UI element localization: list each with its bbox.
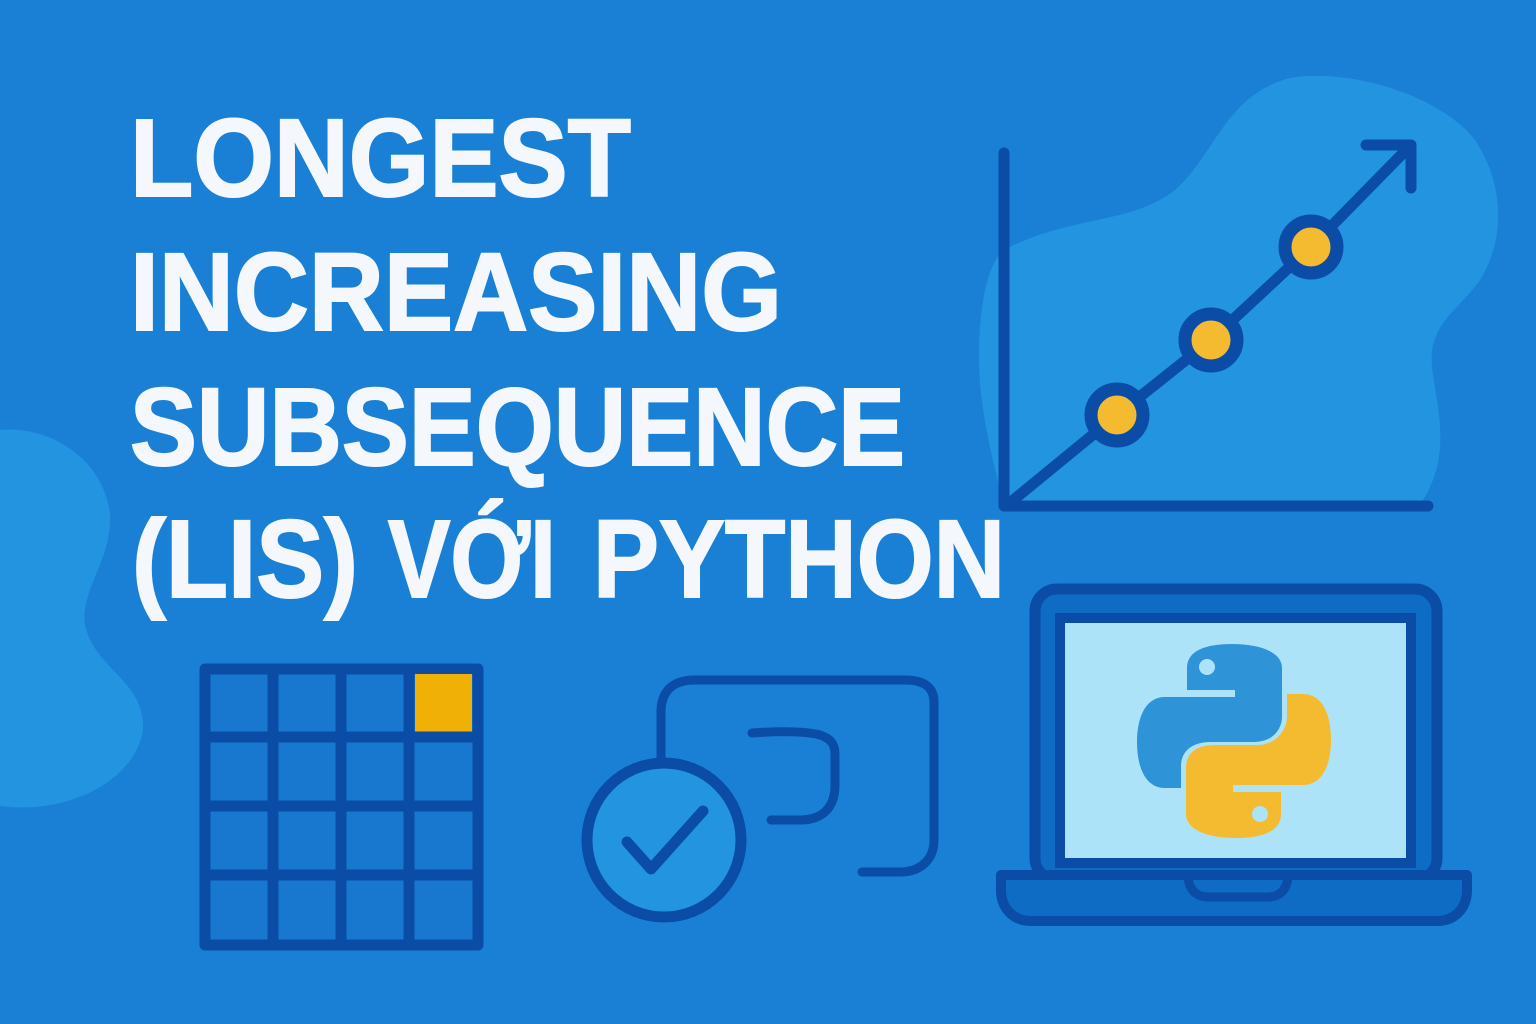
laptop lid: [1035, 589, 1437, 880]
title: LONGEST: [130, 97, 631, 220]
laptop screen: [1060, 618, 1411, 863]
laptop icon: [1001, 589, 1467, 921]
python blue eye: [1199, 659, 1215, 675]
data point 1: [1091, 389, 1143, 441]
trend arrow: [1006, 145, 1411, 506]
title: INCREASING: [130, 231, 782, 354]
grid table icon: [205, 669, 478, 945]
connector outer: [661, 680, 934, 872]
python yellow snake: [1186, 694, 1331, 838]
line chart icon: [1004, 145, 1428, 506]
check mark: [627, 811, 703, 869]
highlighted cell: [415, 674, 472, 732]
python blue snake: [1137, 644, 1282, 788]
title: VỚI: [388, 498, 556, 621]
data point 3: [1285, 221, 1337, 273]
check badge: [587, 763, 741, 917]
check and flow icon: [587, 680, 934, 917]
data point 2: [1185, 314, 1237, 366]
decorative blob: top right: [979, 76, 1498, 505]
python yellow eye: [1252, 806, 1268, 822]
python logo: [1137, 644, 1331, 838]
title: PYTHON: [593, 498, 1005, 621]
connector inner: [752, 732, 835, 820]
laptop base: [1001, 875, 1467, 921]
title: (LIS): [132, 498, 358, 621]
title: [130, 97, 1005, 621]
decorative blob: left: [0, 430, 143, 807]
chart axes: [1004, 153, 1428, 506]
title: SUBSEQUENCE: [130, 366, 905, 489]
laptop notch: [1188, 878, 1288, 897]
